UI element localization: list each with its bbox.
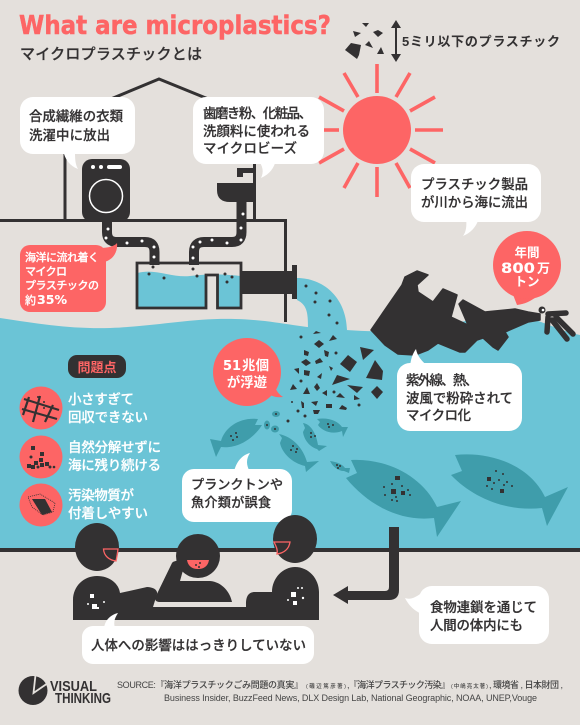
source: Business Insider, BuzzFeed News, DLX Design Lab, National Geographic, NOAA, UNEP,Vouge [164, 693, 537, 703]
logo: THINKING [55, 690, 111, 707]
callout: UV and waves: マイクロ化 [406, 408, 472, 423]
callout: food chain: 食物連鎖を通じて [430, 599, 537, 615]
person: right [246, 515, 319, 620]
callout: plankton: プランクトンや [191, 477, 283, 492]
ocean [0, 316, 580, 549]
problems heading: 問題点 [77, 360, 117, 375]
problem text: not biodegradable: 自然分解せずに [68, 439, 161, 455]
large fish: center [346, 460, 461, 537]
callout: microbeads: 歯磨き粉、化粧品、 [203, 105, 312, 121]
icon: microplastic fragments [345, 23, 384, 59]
icon: sun [319, 64, 443, 197]
source [117, 679, 563, 703]
callout: 8 million tons: 万 [537, 261, 550, 276]
problem text: not biodegradable: 海に残り続ける [68, 457, 161, 473]
logo [18, 675, 111, 707]
callout: 51 trillion: が浮遊 [227, 374, 268, 390]
callout: food chain: 人間の体内にも [430, 618, 523, 633]
house outline [0, 79, 286, 322]
callout: synthetic clothing [20, 97, 135, 169]
icon: washing machine [82, 159, 130, 222]
callout: microbeads: 洗顔料に使われる [203, 124, 310, 139]
callout: plastic from rivers [411, 164, 541, 236]
dining people [73, 515, 319, 620]
source: , 環境省 , 日本財団 , [489, 679, 563, 690]
callout: effects on humans: 人体への影響ははっきりしていない [91, 638, 306, 653]
subtitle: マイクロプラスチックとは [20, 46, 202, 63]
problem text: absorbs pollutants: 付着しやすい [68, 506, 148, 521]
icon: discarded hand [538, 306, 573, 339]
large fish: right [451, 454, 568, 526]
pipes with microplastic dots [104, 198, 244, 265]
small fish: far left [210, 419, 262, 457]
river outflow [297, 278, 347, 338]
problem text: absorbs pollutants: 汚染物質が [68, 487, 134, 503]
callout: synthetic clothing: 合成繊維の衣類 [29, 109, 124, 124]
callout: 35 percent: 海洋に流れ着く [25, 250, 99, 264]
callout: food chain [405, 586, 549, 644]
problem text: not biodegradable [68, 439, 161, 473]
source: ,『海洋プラスチック汚染』 [347, 679, 450, 690]
callout: effects on humans [82, 613, 314, 664]
callout: UV and waves [397, 349, 522, 431]
icon: contaminated fragment [20, 484, 62, 526]
source: SOURCE:『海洋プラスチックごみ問題の真実』 [117, 679, 303, 690]
ocean floor line [0, 548, 580, 552]
callout: 35 percent: マイクロ [25, 265, 67, 278]
callout: 8 million tons [493, 231, 561, 305]
plastic waste pile [371, 271, 540, 355]
callout: microbeads: マイクロビーズ [203, 140, 297, 156]
callout: 51 trillion: 51 [223, 359, 241, 374]
fish school [210, 411, 568, 537]
callout: UV and waves: 紫外線、熱、 [406, 372, 478, 388]
icon: residue pile [20, 436, 62, 478]
problems list [20, 355, 161, 526]
person: left [73, 523, 319, 620]
outlet pipe [241, 265, 297, 299]
icon: size arrow [391, 20, 401, 62]
callout: 51 trillion: 兆個 [242, 358, 269, 373]
plastic inside bodies [87, 587, 304, 609]
person: center [155, 534, 232, 602]
callout: 35 percent: 約 [25, 293, 36, 307]
size label: 5ミリ以下のプラスチック [402, 34, 560, 49]
callout: 8 million tons: 800 [501, 261, 535, 277]
callout: microbeads [193, 97, 324, 178]
icon: net [20, 386, 62, 430]
source: (中嶋亮太著) [451, 682, 488, 690]
problems heading [68, 355, 126, 378]
source: (磯辺篤彦著) [306, 682, 346, 690]
callout: 8 million tons: トン [514, 275, 540, 289]
callout: plastic from rivers: プラスチック製品 [421, 177, 528, 192]
callout: plankton: 魚介類が誤食 [191, 494, 271, 510]
callout: 51 trillion [213, 338, 283, 406]
callout: 35 percent: 35% [37, 292, 67, 307]
problem text: too small: 回収できない [68, 410, 148, 425]
callout: plankton [182, 453, 292, 522]
icon: sink [217, 168, 253, 202]
problem text: too small: 小さすぎて [68, 392, 134, 407]
water treatment tank [137, 263, 241, 308]
callout: 35 percent: プラスチックの [25, 279, 99, 292]
callout: plastic from rivers: が川から海に流出 [421, 194, 528, 210]
problem text: too small [68, 392, 148, 425]
callout: 35 percent [20, 243, 117, 312]
title: What are microplastics? [19, 11, 331, 41]
callout: synthetic clothing: 洗濯中に放出 [29, 127, 110, 143]
plastic inside fish [230, 413, 513, 502]
logo: VISUAL [50, 678, 97, 695]
problem text: absorbs pollutants [68, 487, 148, 521]
callout: 8 million tons: 年間 [514, 245, 540, 260]
food chain arrow [333, 527, 399, 604]
fragments in ocean [286, 331, 383, 422]
callout: UV and waves: 波風で粉砕されて [406, 391, 513, 406]
